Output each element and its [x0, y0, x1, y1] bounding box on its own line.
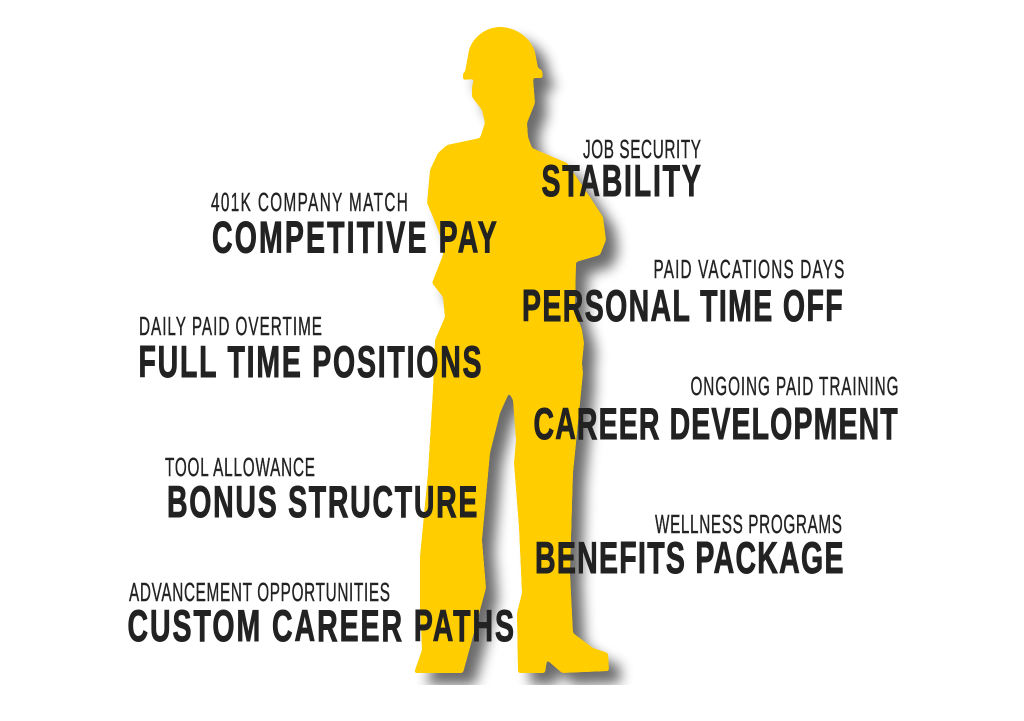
text block: career development: ONGOING PAID TRAINING [690, 373, 899, 401]
worker silhouette with hard hat [414, 27, 609, 673]
text block: full time positions: DAILY PAID OVERTIME [139, 313, 322, 341]
text block: custom career paths: ADVANCEMENT OPPORTUNITIES [129, 579, 390, 607]
text block: competitive pay: 401K COMPANY MATCH [211, 189, 408, 217]
text block: bonus structure: TOOL ALLOWANCE [165, 454, 315, 482]
text block: benefits package: WELLNESS PROGRAMS [655, 511, 842, 539]
text block: stability: STABILITY [542, 156, 701, 206]
text block: custom career paths: CUSTOM CAREER PATHS [128, 601, 514, 651]
text block: bonus structure [165, 454, 477, 527]
text block: career development: CAREER DEVELOPMENT [534, 399, 898, 449]
text block: personal time off: PERSONAL TIME OFF [522, 281, 843, 331]
text block: competitive pay: COMPETITIVE PAY [212, 212, 497, 262]
text block: bonus structure: BONUS STRUCTURE [167, 477, 477, 527]
text block: competitive pay [211, 189, 497, 262]
text block: personal time off [522, 256, 844, 331]
text block: benefits package: BENEFITS PACKAGE [535, 533, 843, 583]
text block: career development [534, 373, 899, 449]
text block: personal time off: PAID VACATIONS DAYS [654, 256, 844, 284]
text block: full time positions [138, 313, 482, 387]
text block: stability: JOB SECURITY [583, 136, 701, 164]
text block: full time positions: FULL TIME POSITIONS [138, 337, 482, 387]
